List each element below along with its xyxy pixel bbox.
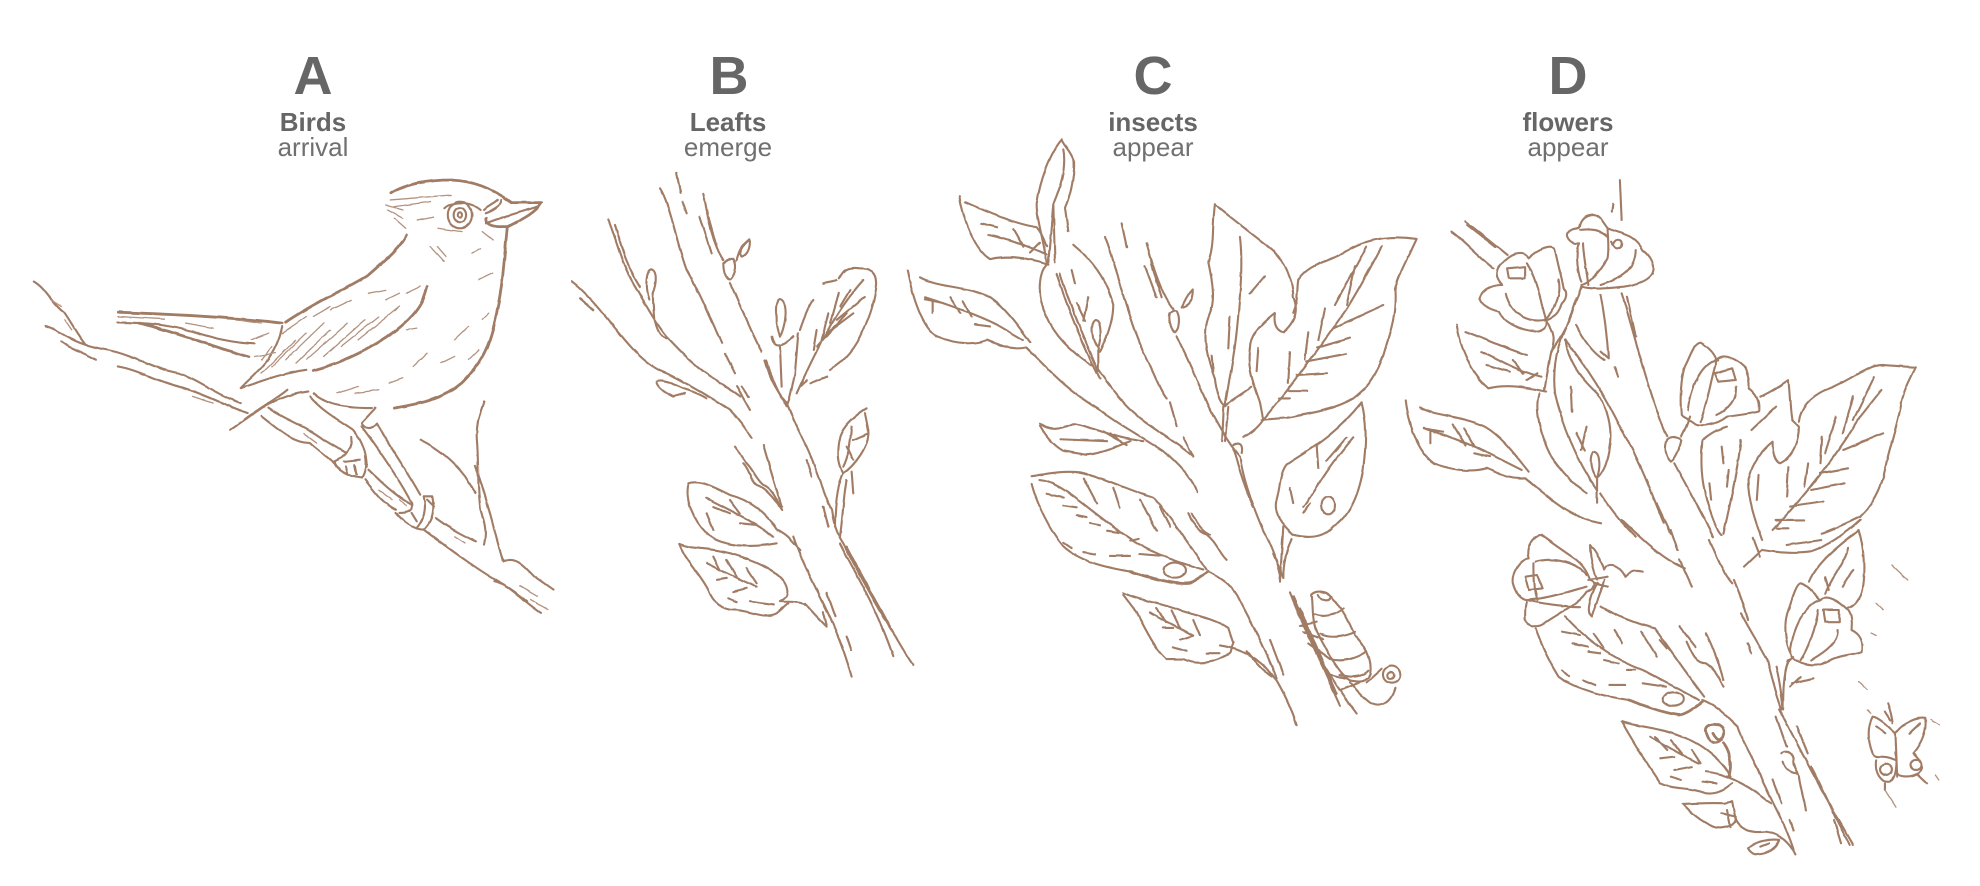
panel: A birds arrival (34, 46, 553, 613)
illustration: lower branch with flowers, buds and butterfly (1513, 520, 1939, 855)
heading: B Leafts emerge: emerge (684, 132, 772, 162)
icon: butterfly (1869, 703, 1927, 790)
icon: flower five (1767, 583, 1862, 710)
icon: caterpillar (1293, 592, 1400, 705)
heading: B Leafts emerge (684, 46, 772, 162)
heading: D flowers appear: flowers (1522, 107, 1614, 137)
panel: D flowers appear (1406, 46, 1939, 855)
icon: bud (1706, 724, 1730, 777)
heading: A Birds arrival: arrival (278, 132, 348, 162)
icon: flower two (1567, 215, 1654, 289)
heading: C insects appear: insects (1108, 107, 1198, 137)
icon: flower three (1665, 343, 1759, 462)
icon: flower one (1480, 247, 1566, 332)
illustration: branch with first leaves (572, 173, 913, 677)
heading: C insects appear (1108, 46, 1198, 162)
heading: C insects appear: appear (1113, 132, 1194, 162)
illustration: upper branch with flowers and leaves (1406, 180, 1916, 540)
heading: A Birds arrival: Birds (280, 107, 346, 137)
heading: B Leafts emerge: Leafts (690, 107, 766, 137)
panel: B leafts emerge (572, 46, 913, 677)
illustration: bird on branch (34, 180, 553, 613)
heading: A Birds arrival: A (294, 46, 332, 106)
panel: C insects appear (907, 46, 1417, 725)
heading: D flowers appear (1522, 46, 1614, 162)
heading: B Leafts emerge: B (710, 46, 748, 106)
icon: flower four (1513, 535, 1643, 626)
heading: C insects appear: C (1134, 46, 1172, 106)
illustration: branch with leaves and caterpillar (907, 140, 1417, 725)
heading: A Birds arrival (278, 46, 348, 162)
heading: D flowers appear: D (1548, 46, 1588, 106)
heading: D flowers appear: appear (1528, 132, 1609, 162)
